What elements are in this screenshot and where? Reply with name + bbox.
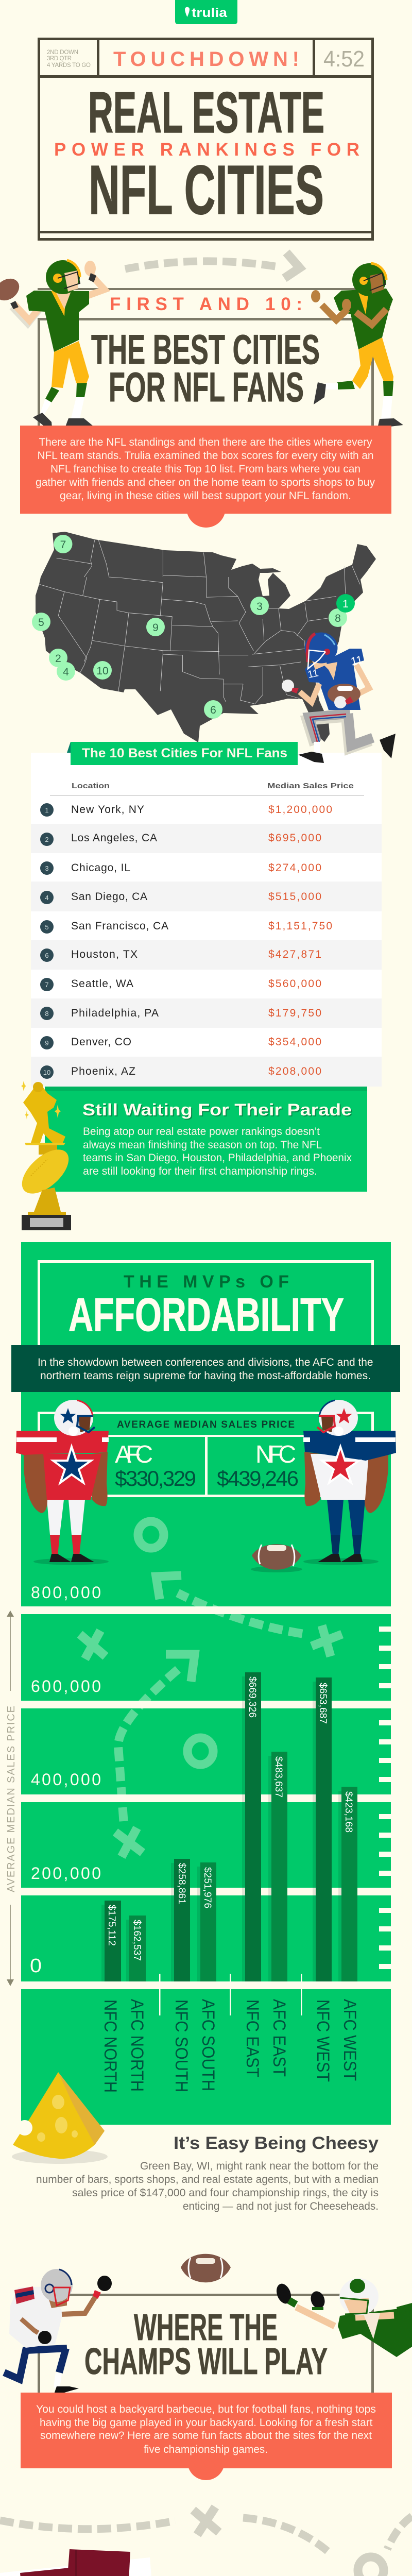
title frame bbox=[39, 1261, 373, 1345]
table rows: $1,151,750 bbox=[268, 920, 332, 932]
table header: Location bbox=[72, 782, 110, 790]
afc stat bbox=[115, 1441, 196, 1490]
nfc stat bbox=[217, 1441, 299, 1490]
illustration: red team player bbox=[16, 1400, 109, 1565]
body text: are still looking for their first championship rings. bbox=[83, 1165, 317, 1177]
panel: intro coral callout bbox=[20, 426, 391, 528]
chart: division labels: NFC SOUTH bbox=[171, 1999, 191, 2092]
table rows: 6 bbox=[45, 952, 49, 959]
chart: median sales price bars: $251,976 bbox=[202, 1867, 213, 1908]
chart: division labels: AFC NORTH bbox=[127, 1999, 147, 2092]
chart: median sales price bars: $162,537 bbox=[131, 1920, 142, 1961]
table rows bbox=[40, 803, 332, 1079]
banner: table title: The 10 Best Cities For NFL Fans bbox=[82, 746, 287, 760]
chart: vertical axis label: AVERAGE MEDIAN SALES PRICE bbox=[6, 1706, 17, 1892]
chart: median sales price bars: $483,637 bbox=[273, 1756, 284, 1798]
table rows: New York, NY bbox=[71, 804, 144, 816]
afc stat: $330,329 bbox=[115, 1466, 196, 1490]
table rows: $427,871 bbox=[268, 948, 321, 960]
table rows: $1,200,000 bbox=[268, 804, 332, 816]
chart: division labels: AFC EAST bbox=[269, 1999, 289, 2077]
panel: title scoreboard bbox=[38, 39, 374, 239]
panel: champs intro coral callout: somewhere new? Here are some fun facts about the sites for the next bbox=[40, 2430, 372, 2442]
table rows: 1 bbox=[45, 806, 49, 814]
table header: Median Sales Price bbox=[267, 782, 354, 790]
body text: teams in San Diego, Houston, Philadelphia, and Phoenix bbox=[83, 1152, 352, 1164]
chart: division labels bbox=[100, 1999, 359, 2093]
text: it's easy being cheesy: It’s Easy Being Cheesy bbox=[174, 2133, 379, 2153]
illustration: receiver player right bbox=[311, 263, 403, 428]
illustration: running player with ball: 11 bbox=[350, 653, 364, 668]
text: it's easy being cheesy bbox=[36, 2133, 379, 2212]
panel: where the champs will play bbox=[38, 2294, 374, 2393]
panel: top ten table bbox=[31, 742, 382, 1087]
game status text: 2ND DOWN bbox=[47, 49, 78, 56]
game clock: 4:52 bbox=[323, 46, 365, 72]
illustration: blue team player bbox=[303, 1400, 396, 1565]
table rows: $695,000 bbox=[268, 832, 321, 844]
chart: division labels: NFC NORTH bbox=[100, 1999, 120, 2093]
body text bbox=[83, 1126, 352, 1177]
subtitle: power rankings for: POWER RANKINGS FOR bbox=[54, 140, 359, 160]
table rows: 2 bbox=[45, 836, 49, 843]
heading front: Still Waiting For Their Parade bbox=[82, 1100, 352, 1119]
map: United States with city markers bbox=[32, 532, 376, 742]
table header bbox=[50, 782, 364, 795]
heading: touchdown: TOUCHDOWN! bbox=[113, 48, 299, 71]
table rows: $560,000 bbox=[268, 978, 321, 990]
chart: axis values: 400,000 bbox=[31, 1770, 101, 1789]
panel: first and 10 board bbox=[38, 288, 374, 426]
table rows: 7 bbox=[45, 981, 49, 989]
heading: first and 10: FIRST AND 10: bbox=[110, 294, 302, 314]
chart: axis values: 0 bbox=[30, 1955, 42, 1977]
chart: median sales price bars: $653,687 bbox=[317, 1683, 328, 1724]
chalk play diagram bbox=[80, 1521, 342, 1857]
table rows: 4 bbox=[45, 894, 49, 902]
chart: median sales price bars: $669,326 bbox=[247, 1676, 258, 1718]
logo: trulia: trulia bbox=[192, 6, 228, 20]
illustration: restaurant menus bbox=[0, 2549, 162, 2576]
illustration: white jersey player bbox=[4, 2269, 112, 2398]
chart: median sales price bars: $258,861 bbox=[176, 1863, 187, 1904]
table rows: 9 bbox=[45, 1039, 49, 1047]
illustration: running player with ball: 11 bbox=[306, 667, 319, 681]
nfc stat: NFC bbox=[255, 1441, 296, 1468]
panel: intro coral callout: NFL team stands. Trulia examined the box scores for every city with an bbox=[37, 450, 374, 462]
table rows: Houston, TX bbox=[71, 948, 138, 960]
table rows: San Francisco, CA bbox=[71, 920, 168, 932]
city markers: 10 bbox=[96, 665, 109, 677]
illustration: football on field bbox=[251, 1544, 302, 1572]
game status text: 4 YARDS TO GO bbox=[47, 62, 91, 69]
yard ticks bbox=[379, 1626, 391, 1969]
city markers: 2 bbox=[55, 653, 61, 665]
illustration: green jersey player bbox=[274, 2278, 412, 2357]
afc stat: AFC bbox=[115, 1441, 153, 1468]
body text: Being atop our real estate power rankings doesn’t bbox=[83, 1126, 320, 1138]
heading: where the: WHERE THE bbox=[134, 2307, 278, 2348]
table rows: $208,000 bbox=[268, 1065, 321, 1077]
text: it's easy being cheesy: enticing — and not just for Cheeseheads. bbox=[183, 2200, 379, 2212]
chart: median sales price bars: $175,112 bbox=[106, 1905, 117, 1946]
chart: axis values: 800,000 bbox=[31, 1583, 101, 1602]
panel: average median sales price scoreboard: AVERAGE MEDIAN SALES PRICE bbox=[117, 1419, 295, 1430]
table rows: 10 bbox=[43, 1069, 50, 1076]
heading: for nfl fans: FOR NFL FANS bbox=[109, 364, 304, 411]
callout: conference showdown bbox=[11, 1345, 400, 1392]
city markers: 6 bbox=[210, 704, 216, 716]
chart: division labels: AFC SOUTH bbox=[198, 1999, 218, 2091]
arrow: play dash top bbox=[125, 252, 300, 278]
city markers: 5 bbox=[38, 617, 44, 629]
chart: division dividers bbox=[159, 1974, 302, 2015]
panel: champs intro coral callout bbox=[21, 2393, 392, 2480]
city markers: 7 bbox=[60, 539, 66, 551]
table rows: Chicago, IL bbox=[71, 862, 130, 874]
city markers: 8 bbox=[335, 613, 341, 624]
city markers: 3 bbox=[256, 601, 263, 613]
illustration: gold trophy bbox=[14, 1081, 76, 1230]
panel: champs intro coral callout: You could host a backyard barbecue, but for football fans, nothing tops bbox=[36, 2403, 376, 2415]
play diagram upper bbox=[0, 2507, 412, 2576]
chart: axis values bbox=[30, 1583, 101, 1977]
illustration: football above heading bbox=[181, 2254, 231, 2282]
panel: intro coral callout: gear, living in these cities will best support your NFL fandom. bbox=[60, 490, 351, 502]
callout: conference showdown: northern teams reign supreme for having the most-affordable homes. bbox=[40, 1370, 371, 1382]
nfc stat: $439,246 bbox=[217, 1466, 299, 1490]
chart: division labels: NFC EAST bbox=[243, 1999, 262, 2077]
chart: axis values: 600,000 bbox=[31, 1677, 101, 1696]
table rows: $515,000 bbox=[268, 891, 321, 903]
logo: trulia bbox=[175, 0, 237, 24]
table rows: Philadelphia, PA bbox=[71, 1007, 159, 1019]
panel: still waiting for their parade bbox=[45, 1087, 367, 1192]
heading shadow: Still Waiting For Their Parade bbox=[83, 1101, 353, 1120]
panel: average median sales price scoreboard bbox=[38, 1413, 374, 1496]
text: it's easy being cheesy: sales price of $147,000 and four championship rings, the city is bbox=[72, 2187, 379, 2199]
callout: conference showdown: In the showdown between conferences and divisions, the AFC and the bbox=[38, 1357, 373, 1368]
chart: division labels: AFC WEST bbox=[340, 1999, 359, 2081]
table rows: 3 bbox=[45, 865, 49, 872]
city markers: 4 bbox=[63, 666, 69, 678]
text: it's easy being cheesy: Green Bay, WI, might rank near the bottom for the bbox=[140, 2160, 379, 2172]
panel: champs intro coral callout: having the big game played in your backyard. Looking for a fresh start bbox=[40, 2417, 373, 2429]
table rows: Phoenix, AZ bbox=[71, 1065, 135, 1077]
chart: division labels: NFC WEST bbox=[313, 1999, 333, 2082]
table rows: San Diego, CA bbox=[71, 891, 147, 903]
chart: median sales price bars: $423,168 bbox=[343, 1791, 354, 1833]
city markers: 1 bbox=[342, 598, 349, 610]
panel: champs intro coral callout: five championship games. bbox=[144, 2444, 268, 2455]
table rows: Denver, CO bbox=[71, 1036, 131, 1048]
chart: median sales price bars bbox=[101, 1672, 357, 1981]
panel: green football field bbox=[21, 1242, 391, 2125]
illustration: cheese wedge bbox=[12, 2072, 108, 2164]
game status text bbox=[47, 49, 91, 69]
body text: always mean finishing the season on top. The NFL bbox=[83, 1139, 322, 1151]
table rows: $179,750 bbox=[268, 1007, 321, 1019]
table rows: 5 bbox=[45, 923, 49, 931]
chart: axis values: 200,000 bbox=[31, 1864, 101, 1883]
table rows: Los Angeles, CA bbox=[71, 832, 157, 844]
game status text: 3RD QTR bbox=[47, 56, 72, 62]
text: it's easy being cheesy: number of bars, sports shops, and real estate agents, but with a median bbox=[36, 2174, 379, 2185]
chart: vertical axis label bbox=[6, 1611, 17, 1986]
illustration: quarterback player left bbox=[0, 260, 105, 433]
table rows: Seattle, WA bbox=[71, 978, 133, 990]
panel: intro coral callout: There are the NFL standings and then there are the cities where every bbox=[39, 436, 372, 448]
panel: intro coral callout: gather with friends and cheer on the home team to sports shops to buy bbox=[36, 477, 375, 488]
table rows: $354,000 bbox=[268, 1036, 321, 1048]
table rows: 8 bbox=[45, 1010, 49, 1018]
table rows: $274,000 bbox=[268, 862, 321, 874]
panel: intro coral callout: NFL franchise to create this Top 10 list. From bars where you can bbox=[50, 463, 360, 475]
banner: table title bbox=[67, 742, 298, 765]
city markers bbox=[32, 535, 355, 719]
illustration: running player with ball bbox=[282, 633, 396, 763]
city markers: 9 bbox=[152, 622, 159, 634]
heading: the mvps of: THE MVPs OF bbox=[124, 1272, 289, 1292]
